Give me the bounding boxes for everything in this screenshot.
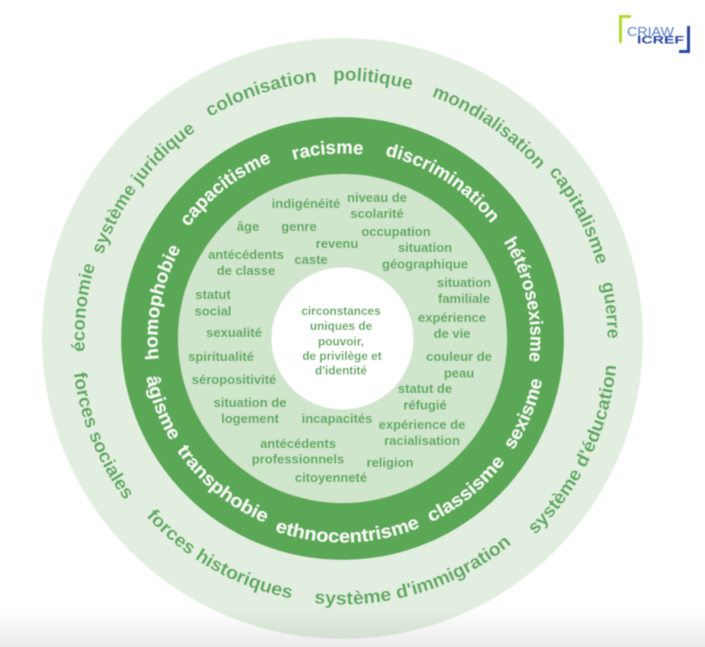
label: religion: religion xyxy=(367,455,414,470)
word: forces historiques: forces historiques xyxy=(147,509,292,598)
label: antécédents de classe: de classe xyxy=(217,263,275,278)
label: antécédents professionnels: professionnels xyxy=(252,451,344,466)
label: expérience de vie: expérience xyxy=(418,310,486,325)
centre text: d'identité xyxy=(315,364,367,378)
label: niveau de scolarité: niveau de xyxy=(347,190,407,205)
bottom shadow band xyxy=(0,608,705,647)
label: antécédents de classe: antécédents xyxy=(208,247,284,262)
word: discrimination: discrimination xyxy=(386,144,498,224)
logo: CRIAW ICREF: ICREF xyxy=(637,34,684,46)
label: spiritualité: spiritualité xyxy=(188,349,254,364)
word: sexisme: sexisme xyxy=(506,378,542,450)
label: situation de logement: logement xyxy=(221,411,280,426)
word: transphobie: transphobie xyxy=(178,444,268,522)
centre text: de privilège et xyxy=(302,349,382,363)
centre text: circonstances xyxy=(301,304,381,318)
word: forces sociales: forces sociales xyxy=(74,372,132,500)
label: occupation: occupation xyxy=(361,224,431,239)
centre text: uniques de xyxy=(310,319,373,333)
word: racisme: racisme xyxy=(292,140,364,160)
label: statut social: statut xyxy=(195,287,231,302)
label: citoyenneté: citoyenneté xyxy=(295,470,367,485)
word: classisme: classisme xyxy=(428,457,504,522)
word: homophobie: homophobie xyxy=(144,245,180,360)
label: situation de logement: situation de xyxy=(214,395,286,410)
label: niveau de scolarité: scolarité xyxy=(350,206,404,221)
label: situation familiale: situation xyxy=(437,275,491,290)
word: hétérosexisme: hétérosexisme xyxy=(504,236,544,362)
word: capacitisme: capacitisme xyxy=(182,154,271,226)
label: couleur de peau: peau xyxy=(444,366,474,381)
label: expérience de racialisation: racialisation xyxy=(384,433,460,448)
label: situation géographique: situation xyxy=(398,240,452,255)
centre circle xyxy=(272,268,414,410)
word: système juridique: système juridique xyxy=(94,124,195,254)
label: statut de réfugié: réfugié xyxy=(403,398,447,413)
word: âgisme: âgisme xyxy=(145,376,178,440)
word: colonisation: colonisation xyxy=(206,72,316,116)
label: situation familiale: familiale xyxy=(438,291,490,306)
outer circle: structural forces xyxy=(42,38,644,640)
label: couleur de peau: couleur de xyxy=(426,349,492,364)
middle ring: forms of oppression xyxy=(120,116,564,560)
label: antécédents professionnels: antécédents xyxy=(260,436,336,451)
label: genre: genre xyxy=(281,219,317,234)
word: économie: économie xyxy=(70,264,95,352)
label: expérience de racialisation: expérience de xyxy=(379,417,465,432)
label: séropositivité: séropositivité xyxy=(192,372,276,387)
centre text: pouvoir, xyxy=(318,334,364,348)
label: indigénéité: indigénéité xyxy=(272,196,340,211)
label: statut de réfugié: statut de xyxy=(398,381,452,396)
label: revenu: revenu xyxy=(316,236,358,251)
word: guerre: guerre xyxy=(598,282,618,338)
word: système d'éducation: système d'éducation xyxy=(530,365,617,534)
word: système d'immigration: système d'immigration xyxy=(314,537,512,608)
label: situation géographique: géographique xyxy=(382,256,468,272)
word: capitalisme: capitalisme xyxy=(550,168,606,264)
word: politique: politique xyxy=(334,67,412,90)
inner ring: aspects of identity xyxy=(178,174,507,503)
label: caste: caste xyxy=(294,252,328,267)
logo: CRIAW ICREF xyxy=(620,16,688,52)
label: incapacités: incapacités xyxy=(302,411,372,426)
logo: CRIAW ICREF: CRIAW xyxy=(627,25,674,39)
word: mondialisation: mondialisation xyxy=(432,87,544,170)
label: âge: âge xyxy=(237,219,259,234)
label: sexualité: sexualité xyxy=(206,325,262,340)
label: statut social: social xyxy=(195,303,231,318)
word: ethnocentrisme: ethnocentrisme xyxy=(276,518,420,544)
label: expérience de vie: de vie xyxy=(434,326,470,341)
